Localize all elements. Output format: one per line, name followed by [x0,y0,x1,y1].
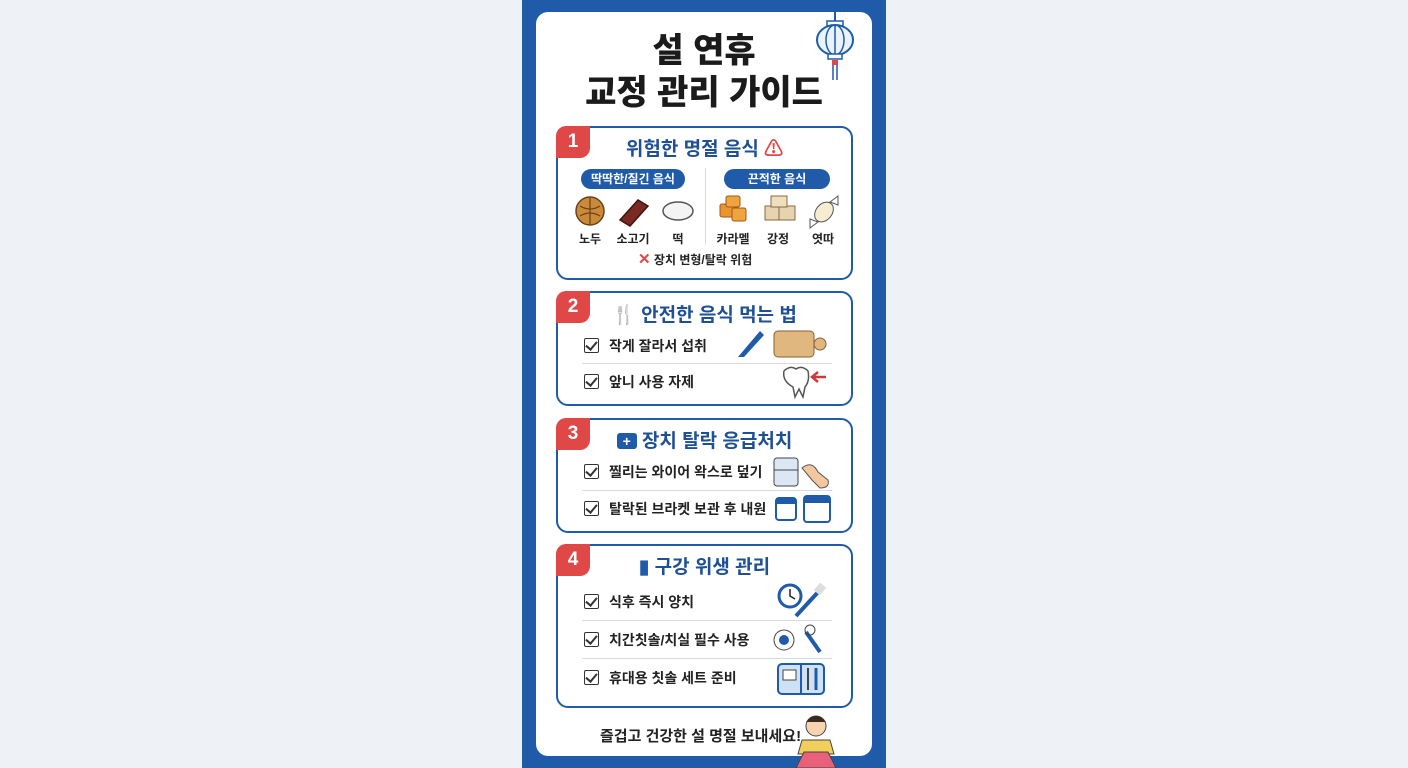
icon: tooth arrow [782,366,826,399]
row: keep bracket: 탈락된 브라켓 보관 후 내원 [609,501,766,517]
pill: sticky: 끈적한 음식 [748,172,806,186]
heading 4: ▮ 구강 위생 관리 [639,557,770,578]
row: travel kit: 휴대용 칫솔 세트 준비 [609,670,737,686]
badge 2 [556,291,590,323]
title: 설 연휴 [652,32,756,70]
icon: container and calendar [775,495,831,523]
pill: hard/chewy: 딱딱한/질긴 음식 [591,172,675,186]
heading 1: 위험한 명절 음식 ⚠ [626,139,783,160]
food labels: 노두 [579,232,601,246]
panel: 4 oral hygiene [556,544,853,708]
heading 2: 🍴 안전한 음식 먹는 법 [612,305,797,326]
icon: floss [774,624,822,654]
title [585,32,823,112]
icon: character in hanbok [796,716,836,768]
white card [536,12,872,756]
panel: 1 dangerous foods: 떡 [672,232,684,246]
footer message: 즐겁고 건강한 설 명절 보내세요! [600,728,801,745]
panel: 1 dangerous foods: 엿따 [812,232,834,246]
badge 1: 1 [568,131,578,152]
icon: lantern [816,12,854,80]
badge 3 [556,418,590,450]
row: avoid front teeth: 앞니 사용 자제 [609,374,694,390]
row: wax: 찔리는 와이어 왁스로 덮기 [609,464,762,480]
panel: 3 emergency [556,418,853,533]
heading 3: + [623,433,631,449]
row: brush after meal: 식후 즉시 양치 [609,594,694,610]
title: 교정 관리 가이드 [585,74,823,112]
panel: 1 dangerous foods [556,126,853,280]
blue column background [522,0,886,768]
badge 4: 4 [568,549,578,570]
heading 3: 장치 탈락 응급처치 [642,431,792,452]
row: floss: 치간칫솔/치실 필수 사용 [609,632,749,648]
badge 2: 2 [568,296,578,317]
panel: 1 dangerous foods: 소고기 [616,232,650,246]
pill: hard/chewy [581,169,685,189]
food icons [575,195,838,229]
icon: travel kit [777,663,825,695]
panel: 1 dangerous foods: 강정 [767,232,789,246]
badge 3: 3 [568,423,578,444]
icon: knife and board [738,330,826,358]
badge 1 [556,126,590,158]
row: cut small: 작게 잘라서 섭취 [609,338,707,354]
panel: 1 dangerous foods: 카라멜 [716,232,750,246]
icon: clock brush [778,582,826,618]
pill: sticky [724,169,830,189]
badge 4 [556,544,590,576]
panel: 2 safe eating [556,291,853,406]
icon: wax case [774,458,829,488]
warning: device damage: ✕ 장치 변형/탈락 위험 [638,251,752,268]
